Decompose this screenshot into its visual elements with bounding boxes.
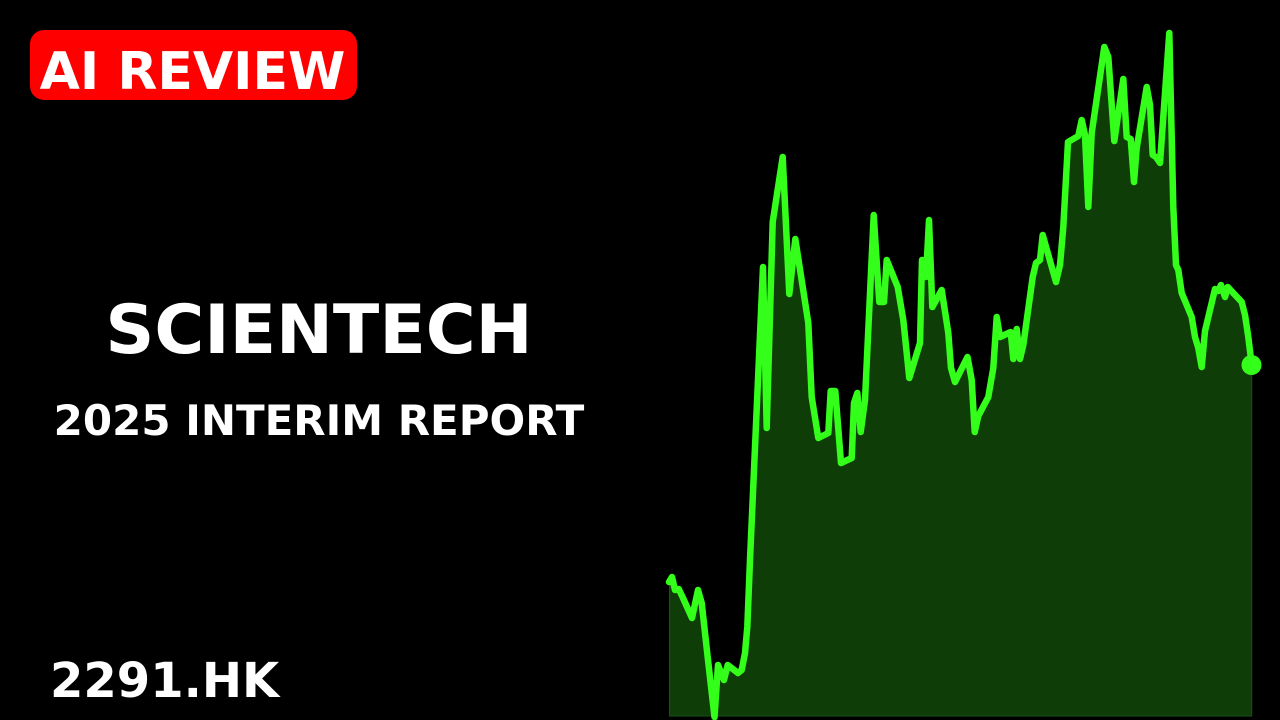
ticker: 2291.HK <box>50 653 281 709</box>
end point marker <box>1242 355 1262 375</box>
chart area fill <box>670 33 1252 717</box>
price line <box>669 33 1252 717</box>
badge: AI REVIEW: AI REVIEW <box>40 42 345 102</box>
subtitle: 2025 INTERIM REPORT <box>54 396 585 445</box>
area line chart <box>669 33 1262 717</box>
title: SCIENTECH <box>105 291 533 370</box>
